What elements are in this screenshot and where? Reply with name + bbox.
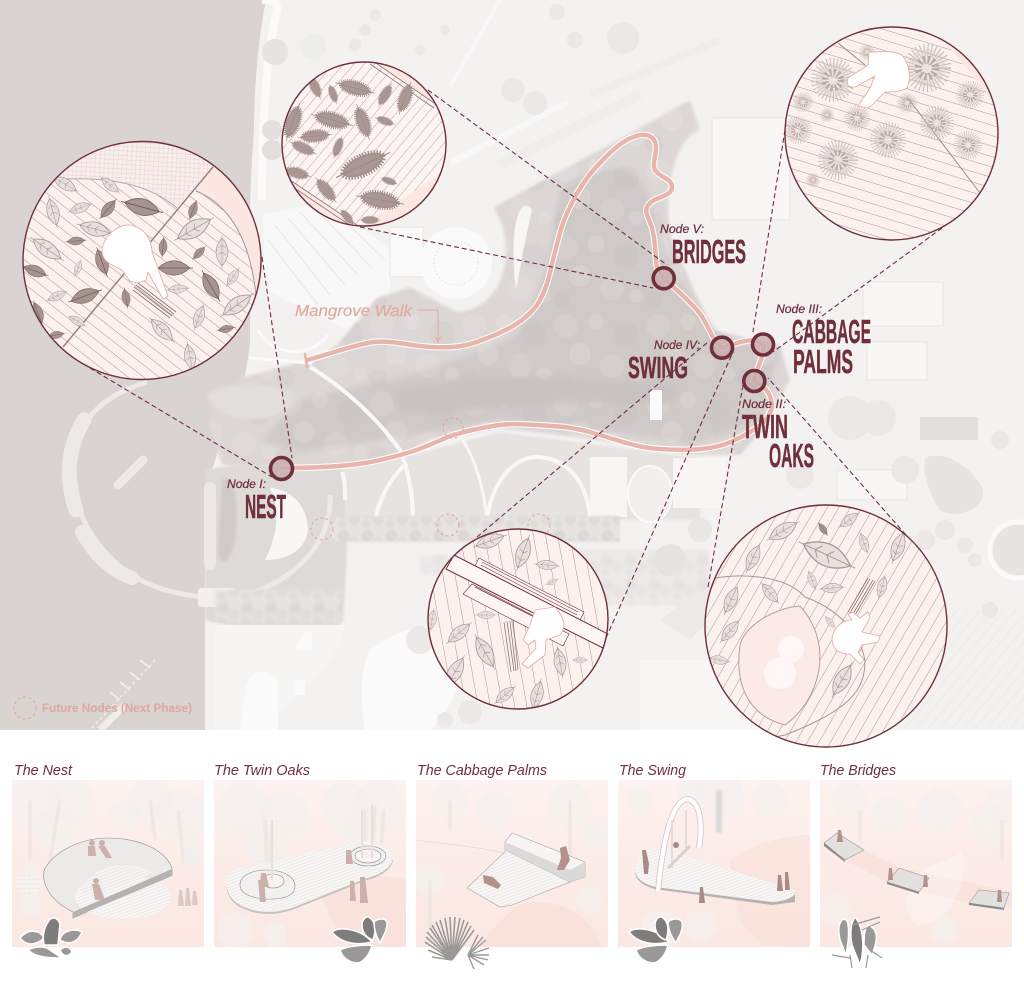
leaves: [706, 509, 910, 701]
palm bursts: [787, 46, 981, 185]
specimen palm: [425, 917, 489, 969]
inset: nest: [20, 140, 270, 380]
panel titles: The Swing: [619, 762, 687, 779]
label: mangrove walk: [295, 303, 440, 342]
oval pier ring: [69, 382, 330, 597]
mangrove dark core: [262, 169, 780, 452]
ring seats: [240, 805, 386, 899]
label: node IV swing: Node IV:: [654, 338, 700, 352]
label: node II twin oaks: TWIN: [742, 408, 788, 445]
people: [483, 846, 570, 889]
water: [0, 0, 266, 730]
sketch trees: [217, 779, 406, 948]
text: OAKS: [769, 437, 814, 474]
panel: the nest: [9, 776, 206, 958]
mangrove canopy texture: [521, 249, 524, 259]
label: mangrove walk: Mangrove Walk: [295, 303, 413, 320]
specimen leaves: [332, 917, 387, 963]
lower deck: [75, 875, 171, 919]
upper deck: [80, 865, 153, 899]
tree row: [330, 516, 620, 542]
central park lawns: [345, 432, 700, 520]
shrubs: [16, 873, 40, 897]
terrain wash: [480, 902, 602, 947]
label: node IV swing: SWING: [628, 350, 688, 385]
label: node I nest: [227, 477, 286, 525]
label: node III cabbage palms: [776, 302, 871, 380]
sketch trees: [626, 771, 788, 950]
panel: the twin oaks: [214, 779, 406, 963]
label: node II twin oaks: Node II:: [742, 397, 786, 411]
panel: the cabbage palms: [414, 780, 609, 969]
people: [258, 850, 368, 903]
deck tiles: [824, 833, 1009, 910]
person: [847, 52, 909, 108]
callout leader lines: [90, 90, 942, 638]
terraced amphitheatre: [268, 212, 424, 305]
north grounds strips and trees: [262, 0, 639, 160]
fronds: [280, 73, 416, 227]
swing arch: [658, 799, 701, 891]
node markers: [270, 268, 774, 480]
pier deck and pond strip: [198, 478, 237, 607]
panel titles: The Twin Oaks: [214, 762, 310, 779]
light leaves: [26, 171, 258, 373]
people: [88, 840, 198, 906]
label: node III cabbage palms: PALMS: [793, 343, 853, 380]
wall and seat: [44, 838, 172, 918]
panel titles: The Bridges: [820, 762, 896, 779]
text: CABBAGE: [792, 313, 871, 350]
panel titles: [14, 762, 896, 779]
plaza circle: [420, 206, 532, 299]
inset: swing: [425, 525, 615, 715]
people: [837, 830, 1002, 902]
panel titles: The Nest: [14, 762, 73, 779]
deck: [467, 845, 570, 907]
label: node I nest: Node I:: [227, 477, 266, 491]
person: [832, 612, 880, 664]
dock: [90, 660, 155, 730]
lower waterfront blocks: [226, 625, 340, 629]
terrain wash: [320, 876, 406, 947]
label: node II twin oaks: [742, 397, 814, 474]
specimen leaves: [20, 918, 82, 958]
legend: future nodes: [14, 697, 192, 719]
person: [522, 607, 564, 668]
future node markers: [311, 418, 550, 540]
inset: twin oaks: [700, 500, 952, 752]
inlet channel: [404, 379, 670, 409]
mid grey parkland: [205, 465, 347, 628]
text: NEST: [245, 488, 286, 525]
legend: future nodes: Future Nodes (Next Phase): [42, 703, 192, 715]
panel: the swing: [618, 771, 810, 963]
label: node V bridges: [660, 222, 746, 270]
walkway band: [824, 843, 1012, 908]
eastern landscape blocks: [406, 390, 1024, 730]
people: [642, 842, 790, 903]
deck: [635, 850, 795, 905]
sketch trees: [819, 782, 1014, 944]
sketch trees: [414, 782, 609, 930]
benches: [446, 555, 608, 648]
label: node V bridges: Node V:: [660, 222, 704, 236]
leaves: [426, 529, 588, 713]
nest lawn: [265, 488, 308, 560]
label: node III cabbage palms: Node III:: [776, 302, 822, 316]
terrain wash: [730, 835, 810, 947]
panel titles: The Cabbage Palms: [417, 762, 547, 779]
north lawn: [250, 311, 333, 365]
mangrove outer forest: [208, 100, 790, 472]
site plan base map: [0, 0, 1024, 730]
person: [102, 225, 168, 299]
specimen leaves: [629, 917, 682, 963]
inset: cabbage palms: [780, 20, 1005, 245]
dark leaves: [20, 194, 236, 340]
park arcs: [310, 367, 590, 530]
text: BRIDGES: [672, 233, 746, 270]
bench: [505, 833, 585, 882]
inset: bridges: [280, 60, 446, 230]
eastern buildings: [712, 118, 943, 500]
sketch trees: [9, 776, 206, 917]
capsule deck: [226, 844, 393, 914]
lower park trees: [215, 550, 710, 622]
panel: the bridges: [819, 780, 1014, 968]
sandy clearing: [208, 387, 271, 418]
specimen plant: [832, 917, 882, 968]
label: node IV swing: [628, 338, 700, 385]
mangrove walk route: [282, 135, 772, 468]
